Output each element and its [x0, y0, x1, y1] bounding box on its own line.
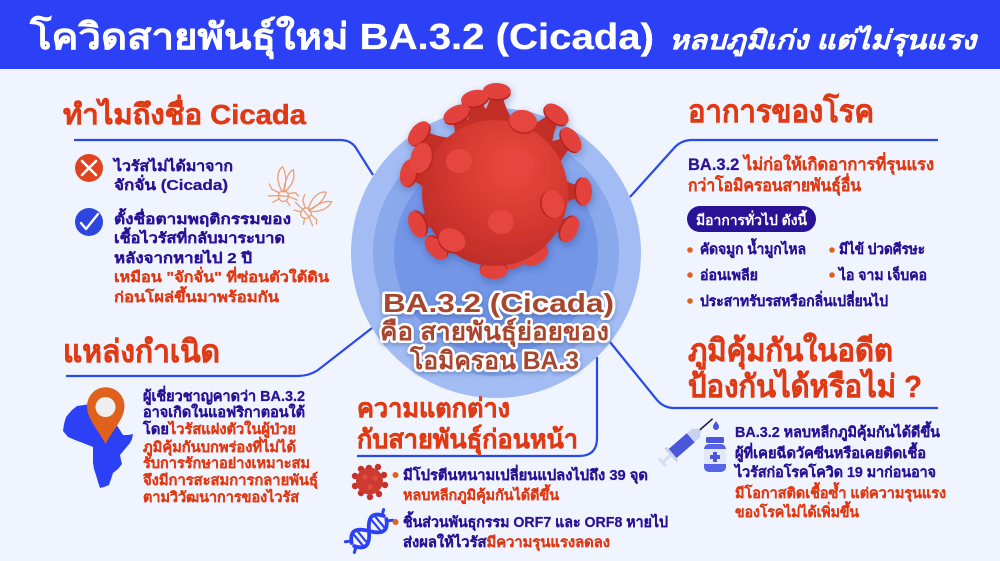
symptom list: อ่อนเพลีย [700, 267, 758, 284]
central label [380, 288, 614, 375]
text: named after behaviour: หลังจากหายไป 2 ปี [114, 249, 252, 267]
text: origin description: โดยไวรัสแฝงตัวในผู้ป่วย [142, 420, 296, 438]
text: immunity description [733, 421, 946, 521]
text: spike protein changes [392, 464, 648, 504]
text: immunity description: ผู้ที่เคยฉีดวัคซีนหรือเคยติดเชื้อ [735, 442, 926, 462]
text: origin description: ผู้เชี่ยวชาญคาดว่า BA.3.2 [143, 385, 305, 405]
icon: cross [75, 154, 103, 182]
pill: common symptoms: มีอาการทั่วไป ดังนี้ [696, 209, 807, 228]
subtitle: หลบภูมิเก่ง แต่ไม่รุนแรง [669, 25, 979, 57]
panel: origin [63, 334, 318, 506]
text: severity note: กว่าโอมิครอนสายพันธุ์อื่น [688, 173, 861, 196]
text: ORF7 and ORF8: ส่งผลให้ไวรัสมีความรุนแรงลดลง [403, 533, 610, 551]
text: not from cicadas: ไวรัสไม่ได้มาจาก [112, 157, 233, 175]
connector lines [66, 140, 938, 456]
heading: past immunity: ป้องกันได้หรือไม่ ? [688, 368, 922, 404]
heading: differences: กับสายพันธุ์ก่อนหน้า [357, 424, 578, 456]
text: named after behaviour [114, 208, 329, 306]
heading: past immunity [688, 332, 922, 404]
text: origin description: ภูมิคุ้มกันบกพร่องที่ไม่ได้ [143, 436, 296, 456]
icon: DNA [344, 508, 394, 554]
heading: why Cicada: ทำไมถึงชื่อ Cicada [63, 94, 306, 130]
title banner [0, 0, 1000, 69]
icon: check [75, 208, 103, 236]
symptom list [687, 238, 927, 310]
text: immunity description: BA.3.2 หลบหลีกภูมิคุ้มกันได้ดีขึ้น [735, 421, 940, 441]
text: origin description: อาจเกิดในแอฟริกาตอนใต้ [143, 403, 305, 421]
text: named after behaviour: ก่อนโผล่ขึ้นมาพร้อมกัน [114, 286, 279, 306]
text: not from cicadas [112, 157, 233, 194]
text: spike protein changes: มีโปรตีนหนามเปลี่ยนแปลงไปถึง 39 จุด [403, 464, 648, 484]
central virus illustration [395, 83, 593, 279]
text: immunity description: มีโอกาสติดเชื้อซ้ำ แต่ความรุนแรง [735, 482, 946, 502]
icon: cicadas [268, 166, 338, 230]
panel: differences [344, 393, 668, 554]
text: ORF7 and ORF8: ชิ้นส่วนพันธุกรรม ORF7 และ ORF8 หายไป [403, 511, 668, 531]
heading: differences [357, 393, 578, 456]
text: not from cicadas: จักจั่น (Cicada) [114, 174, 228, 194]
central label: โอมิครอน BA.3 [409, 345, 579, 375]
heading: differences: ความแตกต่าง [357, 393, 510, 423]
text: severity note [688, 152, 934, 196]
text: named after behaviour: เชื้อไวรัสที่กลับมาระบาด [114, 227, 285, 247]
icon: Africa map with pin [63, 387, 133, 488]
text: origin description: ตามวิวัฒนาการของไวรัส [143, 488, 299, 506]
text: immunity description: ไวรัสก่อโรคโควิด 19 มาก่อนอาจ [733, 463, 936, 481]
pill: common symptoms [687, 206, 816, 232]
central circles [351, 108, 641, 398]
text: named after behaviour: ตั้งชื่อตามพฤติกรรมของ [114, 208, 291, 228]
heading: past immunity: ภูมิคุ้มกันในอดีต [688, 332, 893, 370]
icon: syringe and vaccine bottle [655, 412, 726, 472]
text: spike protein changes: หลบหลีกภูมิคุ้มกันได้ดีขึ้น [403, 484, 559, 504]
text: origin description: รับการรักษาอย่างเหมาะสม [143, 456, 310, 472]
text: severity note: BA.3.2 ไม่ก่อให้เกิดอาการที่รุนแรง [688, 152, 934, 175]
symptom list: มีไข้ ปวดศีรษะ [839, 240, 925, 258]
symptom list: ไอ จาม เจ็บคอ [837, 265, 927, 284]
symptom list: คัดจมูก น้ำมูกไหล [700, 238, 806, 258]
panel: symptoms [687, 93, 934, 310]
central label: BA.3.2 (Cicada) [383, 288, 614, 318]
text: named after behaviour: เหมือน "จักจั่น" ที่ซ่อนตัวใต้ดิน [114, 266, 329, 286]
icon: small virus [352, 464, 388, 500]
central label: คือ สายพันธุ์ย่อยของ [380, 317, 609, 348]
heading: origin: แหล่งกำเนิด [63, 334, 220, 369]
heading: symptoms: อาการของโรค [688, 93, 874, 129]
text: ORF7 and ORF8 [392, 511, 668, 551]
panel: past immunity [655, 332, 946, 521]
symptom list: ประสาทรับรสหรือกลิ่นเปลี่ยนไป [700, 290, 888, 310]
text: origin description: จึงมีการสะสมการกลายพันธุ์ [142, 471, 318, 489]
panel: why Cicada [63, 94, 338, 306]
text: origin description [142, 385, 318, 506]
main title: โควิดสายพันธุ์ใหม่ BA.3.2 (Cicada) [29, 15, 654, 60]
text: immunity description: ของโรคไม่ได้เพิ่มขึ้น [735, 501, 859, 521]
